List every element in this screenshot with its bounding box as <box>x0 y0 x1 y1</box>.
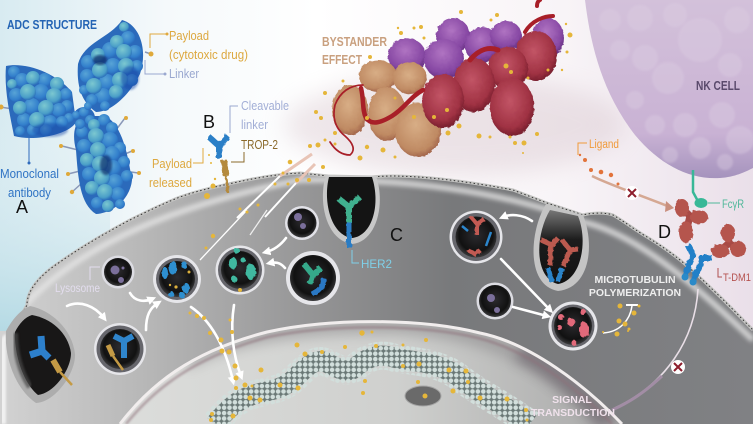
FcyR receptor: FcγR <box>722 197 744 211</box>
vesicle: green digested ADC <box>216 246 264 294</box>
antibody in pit <box>30 336 72 385</box>
panel: bystander effect tumor cells <box>285 0 625 175</box>
antibody: trop-2 ADC B <box>209 136 228 193</box>
vesicle: red T-DM1 <box>450 210 502 264</box>
nucleolus <box>405 386 441 406</box>
callout: payload: Payload <box>169 29 209 43</box>
callout: TROP-2: TROP-2 <box>241 138 278 152</box>
vesicle: lysosome left <box>102 256 134 288</box>
arrows: vesicle trafficking <box>67 215 550 381</box>
ligand dots and blocked arrow <box>578 139 674 212</box>
callout: cleavable linker: linker <box>241 118 268 132</box>
label: C: C <box>390 225 403 245</box>
vesicle: blue digested ADC <box>153 255 201 303</box>
vesicle: small lysosome centre <box>285 206 319 240</box>
pit: HER2 <box>323 175 380 248</box>
signal transduction pathway <box>531 289 698 419</box>
callout: payload <box>150 29 248 62</box>
title: ADC structure: ADC STRUCTURE <box>7 17 97 32</box>
DNA helix <box>215 356 530 424</box>
label: lysosome: Lysosome <box>55 281 100 295</box>
heading: bystander effect: EFFECT <box>322 52 362 67</box>
callout: payload released <box>149 148 203 190</box>
label: NK cell: NK CELL <box>696 78 740 93</box>
callout: payload: (cytotoxic drug) <box>169 48 248 62</box>
callout: TROP-2 <box>231 138 278 162</box>
callout: cleavable linker <box>230 99 289 133</box>
vesicle: green ADC <box>286 251 340 305</box>
pit: left endocytosis <box>6 306 75 403</box>
label: HER2: HER2 <box>361 257 392 271</box>
callout: cleavable linker: Cleavable <box>241 99 289 113</box>
icon: ADC antibody structure <box>0 20 154 214</box>
vesicle: gold ADC <box>94 323 146 375</box>
signal transduction pathway: SIGNAL <box>552 394 592 406</box>
label: lysosome <box>55 267 100 295</box>
vesicle: lysosome right <box>476 282 514 320</box>
ligand dots and blocked arrow: Ligand <box>589 139 619 151</box>
arrow: microtubulin inhibition <box>603 305 638 333</box>
panel: NK cell <box>585 0 753 178</box>
nucleus <box>120 322 622 424</box>
heading: microtubulin polymerization <box>589 274 681 299</box>
arrows: payload release toward bystander cells <box>200 154 315 260</box>
signal transduction pathway: TRANSDUCTION <box>531 407 615 419</box>
label: D: D <box>658 222 671 242</box>
T-DM1 antibodies with HER2 receptors <box>675 199 746 286</box>
heading: bystander effect <box>322 34 387 67</box>
label A: A <box>16 197 28 217</box>
heading: microtubulin polymerization: MICROTUBULIN <box>594 274 676 286</box>
label: T-DM1 <box>718 268 751 284</box>
tan bystander cells <box>332 60 441 157</box>
callout: linker <box>145 60 199 81</box>
pit: T-DM1 <box>534 204 589 291</box>
red tumor cells <box>422 31 557 136</box>
heading: microtubulin polymerization: POLYMERIZATION <box>589 287 681 299</box>
callout: payload released: released <box>149 176 192 190</box>
callout: monoclonal antibody <box>0 137 59 200</box>
callout: linker: Linker <box>169 67 199 81</box>
vesicle: pink digested <box>548 302 598 350</box>
antibody green <box>339 197 360 248</box>
label: HER2 <box>352 250 392 271</box>
callout: monoclonal antibody: antibody <box>8 186 52 200</box>
callout: payload released: Payload <box>152 157 192 171</box>
callout: monoclonal antibody: Monoclonal <box>0 167 59 181</box>
payload drug dots <box>188 10 640 422</box>
purple bystander cells <box>388 18 564 79</box>
panel: cell with cytoplasm <box>0 173 753 424</box>
FcyR receptor <box>693 170 744 211</box>
label B: B <box>203 112 215 132</box>
blood vessels <box>330 0 553 155</box>
heading: bystander effect: BYSTANDER <box>322 34 387 49</box>
